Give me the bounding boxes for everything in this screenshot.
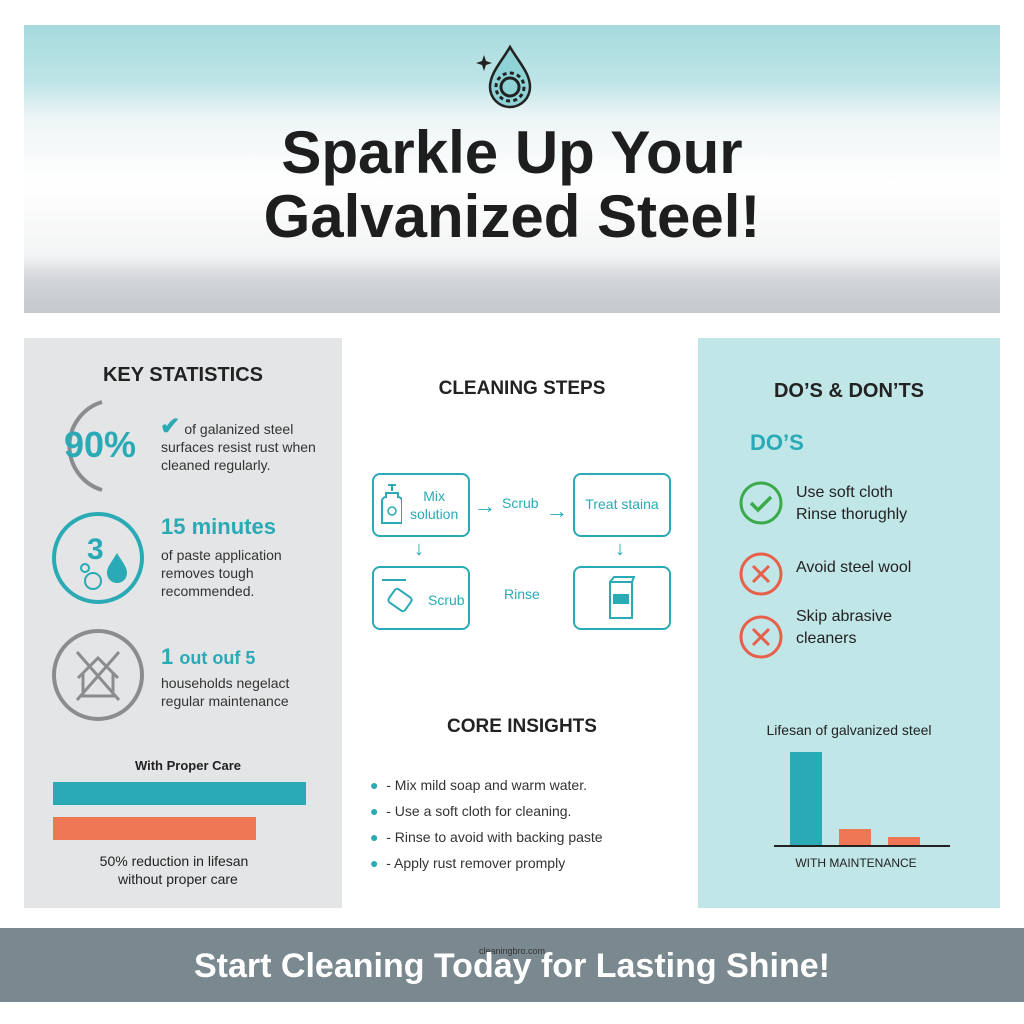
insight list: ● - Mix mild soap and warm water. [370, 777, 587, 793]
step: paste box [573, 566, 671, 630]
insight list [370, 777, 603, 871]
stat 90%: surfaces resist rust when [161, 439, 316, 455]
don't item [740, 608, 892, 658]
heading: KEY STATISTICS [103, 364, 263, 386]
arrow down: ↓ [615, 538, 625, 560]
stat 90%: cleaned regularly. [161, 457, 270, 473]
do item [740, 482, 908, 524]
bar chart: with proper care [53, 758, 306, 887]
title [264, 119, 760, 250]
insight list: ● - Apply rust remover promply [370, 855, 565, 871]
stat 15 minutes: 15 minutes [161, 514, 276, 539]
stat 90%: ✔ [160, 413, 180, 440]
panel: key statistics [24, 338, 342, 908]
step: scrub: Scrub [428, 592, 465, 608]
panel: cleaning steps [370, 378, 671, 871]
heading core insights: CORE INSIGHTS [447, 716, 597, 737]
stat 1 out of 5: regular maintenance [161, 693, 289, 709]
watermark: cleaningbro.com [479, 946, 545, 956]
don't item: Avoid steel wool [796, 559, 911, 576]
stat 90% [64, 400, 316, 492]
step: mix solution: Mix [423, 488, 445, 504]
step label rinse: Rinse [504, 586, 540, 602]
insight list: ● - Use a soft cloth for cleaning. [370, 803, 571, 819]
bar chart: lifespan: WITH MAINTENANCE [795, 856, 917, 870]
stat 1 out of 5 [52, 629, 290, 721]
step: mix solution: solution [410, 506, 458, 522]
stat 1 out of 5: households negelact [161, 675, 289, 691]
bar chart: with proper care: 50% reduction in lifesan [100, 853, 248, 869]
bar chart: lifespan [766, 722, 950, 870]
step: mix solution [372, 473, 470, 537]
do item: Rinse thorughly [796, 506, 907, 523]
header banner [24, 25, 1000, 313]
step label scrub: Scrub [502, 495, 539, 511]
step: treat stains: Treat staina [585, 496, 659, 512]
don't item: Skip abrasive [796, 608, 892, 625]
bar chart: with proper care: without proper care [118, 871, 238, 887]
stat 15 minutes: of paste application [161, 547, 282, 563]
stat 15 minutes: recommended. [161, 583, 254, 599]
subheading do's: DO’S [750, 430, 804, 455]
stat 90%: 90% [64, 424, 136, 465]
don't item [740, 552, 911, 596]
title: Galvanized Steel! [264, 183, 760, 250]
stat 90%: of galanized steel [184, 421, 293, 437]
icon: gear drop [476, 44, 532, 108]
insight list: ● - Rinse to avoid with backing paste [370, 829, 603, 845]
bar chart: lifespan: Lifesan of galvanized steel [766, 722, 932, 738]
title: Sparkle Up Your [281, 119, 743, 186]
heading: CLEANING STEPS [439, 378, 605, 399]
step: treat stains [573, 473, 671, 537]
stat 15 minutes: removes tough [161, 565, 254, 581]
don't item: cleaners [796, 630, 856, 647]
stat 1 out of 5: 1 out ouf 5 [161, 644, 255, 669]
arrow: → [474, 493, 496, 518]
do item: Use soft cloth [796, 484, 893, 501]
step: scrub [372, 566, 470, 630]
arrow: → [546, 498, 568, 523]
arrow down: ↓ [414, 538, 424, 560]
bar chart: with proper care: With Proper Care [135, 758, 241, 773]
stat 15 minutes [52, 512, 282, 604]
heading: DO’S & DON’TS [774, 380, 924, 402]
footer banner [0, 928, 1024, 1002]
panel: do's and don'ts [698, 338, 1000, 908]
footer text: Start Cleaning Today for Lasting Shine! [194, 947, 830, 985]
stat 15 minutes: 3 [87, 533, 104, 566]
